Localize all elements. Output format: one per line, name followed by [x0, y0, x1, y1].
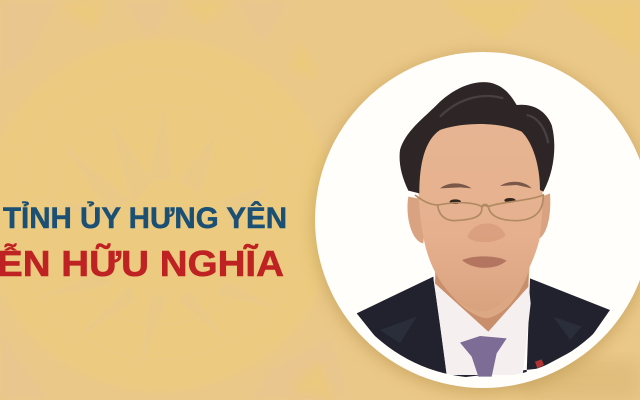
tie [460, 336, 507, 377]
neck shadow [435, 273, 528, 332]
glasses [415, 195, 543, 221]
title line: name: ỄN HỮU NGHĨA [0, 242, 284, 284]
portrait photo [357, 82, 610, 380]
ears [407, 197, 427, 243]
suit lapel shading [380, 317, 582, 343]
eyebrows [440, 182, 532, 188]
nose [467, 223, 506, 242]
circle shadow [313, 53, 640, 393]
flag pin [535, 359, 544, 368]
neck [435, 260, 530, 332]
eyes [450, 199, 461, 204]
shirt [433, 278, 531, 375]
title line: province party committee: TỈNH ỦY HƯNG YÊN [3, 201, 287, 235]
hair highlights [440, 96, 548, 143]
face [418, 124, 542, 292]
star rays [30, 100, 285, 370]
white portrait frame [315, 52, 640, 388]
hair [400, 82, 554, 193]
mouth [462, 256, 507, 268]
suit jacket [357, 277, 610, 380]
